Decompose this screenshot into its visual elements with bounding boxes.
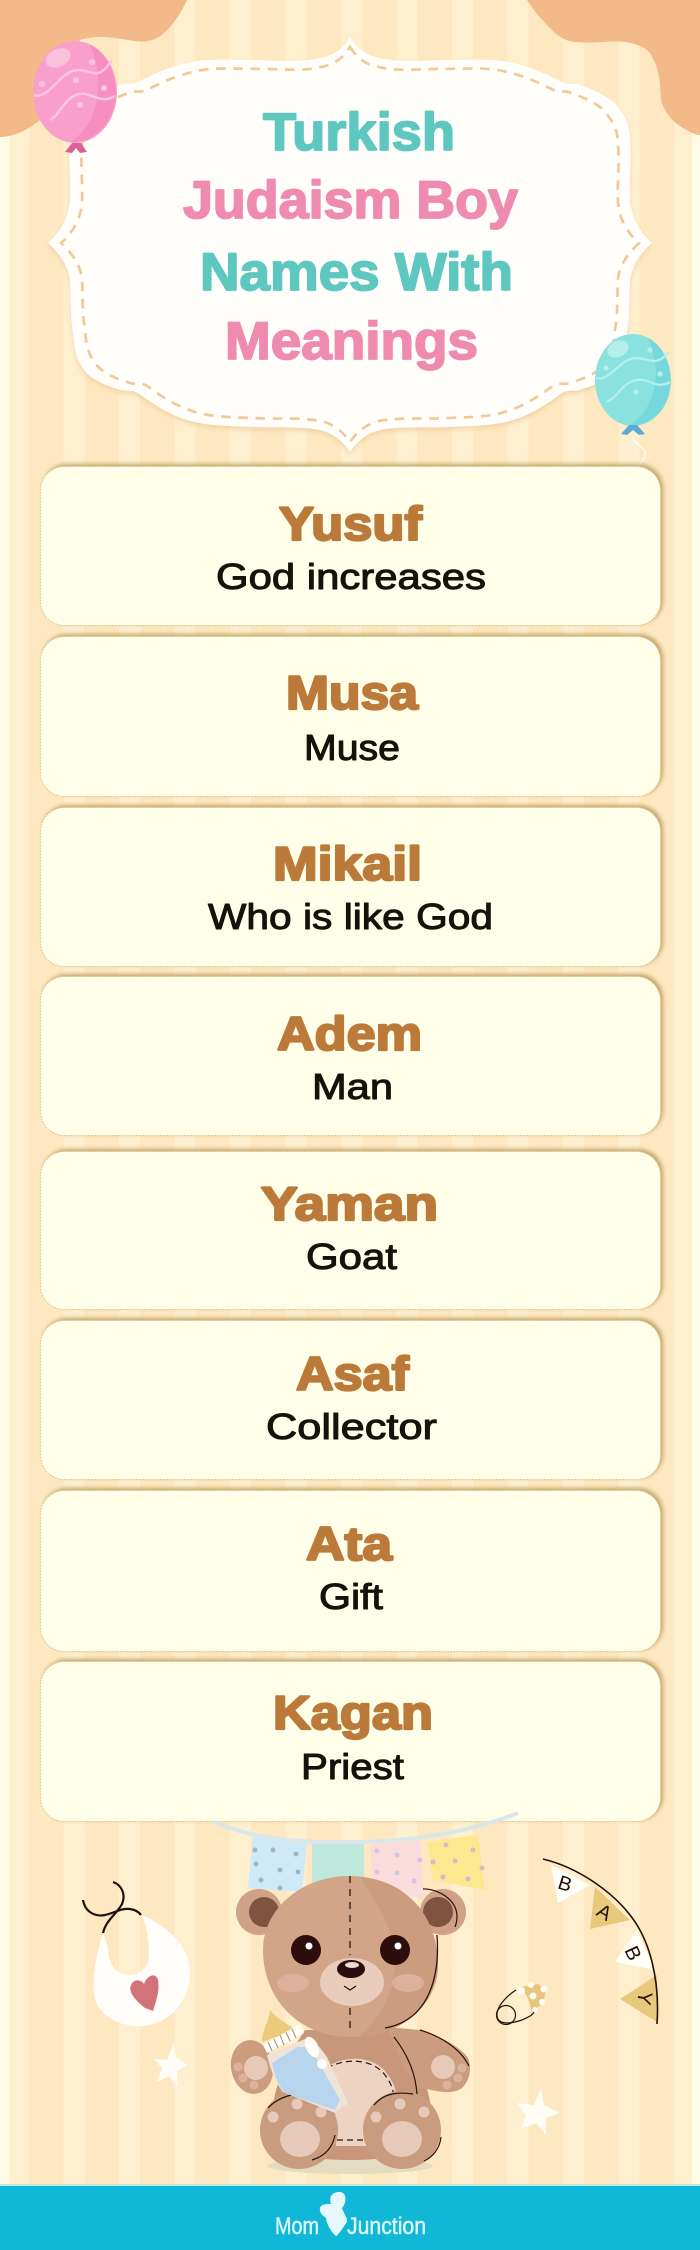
card 1: Yusuf: Yusuf bbox=[279, 497, 422, 550]
icon: safety pin bbox=[496, 1982, 548, 2024]
icon: baby bib bbox=[83, 1882, 190, 2026]
card 6: Asaf: Asaf bbox=[296, 1347, 409, 1400]
title: Judaism Boy bbox=[183, 171, 519, 230]
title: Turkish bbox=[263, 103, 455, 162]
card 3: Mikail: Mikail bbox=[273, 837, 422, 890]
card 7: Ata: Gift bbox=[319, 1576, 383, 1617]
card 5: Yaman: Yaman bbox=[261, 1177, 438, 1230]
title plaque bbox=[48, 37, 652, 455]
top-left drape bbox=[0, 0, 187, 137]
baby pennant banner: A bbox=[593, 1900, 616, 1926]
card 1: Yusuf bbox=[40, 464, 663, 626]
icon: star left bbox=[154, 2042, 188, 2088]
card 6: Asaf bbox=[40, 1318, 663, 1480]
card 8: Kagan: Kagan bbox=[273, 1686, 433, 1739]
card 3: Mikail bbox=[40, 805, 663, 966]
baby pennant banner bbox=[543, 1859, 658, 2024]
title: Names With bbox=[200, 243, 513, 302]
card 6: Asaf: Collector bbox=[266, 1406, 437, 1447]
icon: blue balloon bbox=[595, 334, 671, 470]
title bbox=[183, 103, 519, 371]
baby pennant banner: B bbox=[620, 1943, 645, 1964]
MomJunction logo: Junction bbox=[347, 2213, 426, 2240]
footer bar bbox=[0, 2184, 700, 2250]
card 4: Adem: Adem bbox=[277, 1007, 422, 1060]
card 5: Yaman bbox=[40, 1149, 663, 1310]
card 2: Musa bbox=[40, 634, 663, 796]
card 2: Musa: Muse bbox=[304, 727, 400, 768]
MomJunction logo: Mom bbox=[275, 2213, 319, 2240]
card 8: Kagan bbox=[40, 1659, 663, 1822]
baby pennant banner: B bbox=[555, 1872, 575, 1897]
bunting flags bbox=[214, 1813, 518, 1900]
top-right drape bbox=[527, 0, 700, 135]
card 3: Mikail: Who is like God bbox=[208, 896, 493, 937]
title: Meanings bbox=[225, 312, 478, 371]
icon: pink balloon bbox=[33, 41, 117, 153]
icon: star right bbox=[517, 2088, 560, 2135]
card 7: Ata bbox=[40, 1488, 663, 1652]
card 8: Kagan: Priest bbox=[301, 1746, 404, 1787]
MomJunction logo bbox=[275, 2192, 426, 2240]
baby pennant banner: Y bbox=[632, 1990, 656, 2007]
icon: teddy bear with bottle bbox=[227, 1876, 470, 2174]
card 4: Adem bbox=[40, 974, 663, 1136]
card 4: Adem: Man bbox=[312, 1066, 393, 1107]
card 7: Ata: Ata bbox=[306, 1517, 393, 1570]
card 2: Musa: Musa bbox=[286, 666, 419, 719]
card 1: Yusuf: God increases bbox=[216, 556, 486, 597]
card 5: Yaman: Goat bbox=[306, 1236, 397, 1277]
